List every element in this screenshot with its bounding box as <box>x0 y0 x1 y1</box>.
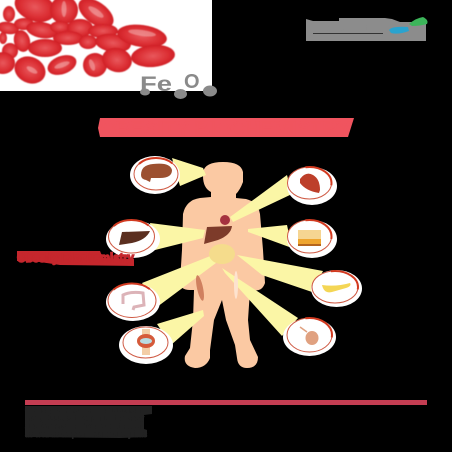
chemical formula Fe2O3 <box>140 71 217 101</box>
title: OBESITY BIOCHEMISTRY <box>100 119 350 139</box>
red side label: Obesity Biochemistry <box>17 250 135 265</box>
footer text: as well as adipose tissue and joints <box>25 429 147 439</box>
chemical formula Fe2O3: Fe <box>140 73 172 96</box>
callout: brain <box>130 156 180 194</box>
icon: pancreas <box>322 283 350 292</box>
panel: red blood cells photo <box>0 0 212 91</box>
callout: liver <box>106 220 160 258</box>
chemical formula Fe2O3: 3 <box>207 86 213 97</box>
callout: colon <box>106 283 160 321</box>
icon: liver <box>119 231 150 245</box>
icon: heart <box>300 174 320 193</box>
organs inside the body <box>194 215 238 301</box>
footer text: Obesity alters iron metabolism in <box>25 405 152 415</box>
icon: brain <box>141 164 172 182</box>
callout: pancreas <box>311 270 362 307</box>
callout: knee <box>119 326 173 364</box>
footer text <box>25 405 152 439</box>
logo: health <box>312 23 382 33</box>
footer text: and affects the liver and the gut <box>25 421 144 431</box>
footer text: many tissues throughout the body <box>25 413 145 423</box>
logo <box>306 17 428 41</box>
callout beams <box>142 158 323 345</box>
icon: gallbladder <box>300 327 318 345</box>
icon: colon <box>123 292 144 310</box>
icon: fat layers <box>298 230 321 246</box>
chemical formula Fe2O3: 2 <box>177 90 183 101</box>
callout: gallbladder <box>283 318 336 356</box>
callout: adipose tissue <box>287 220 337 258</box>
footer divider <box>25 400 427 405</box>
chemical formula Fe2O3: O <box>184 71 200 93</box>
icon: knee joint <box>137 329 155 355</box>
callout: heart <box>287 167 337 205</box>
human body figure <box>180 162 265 368</box>
